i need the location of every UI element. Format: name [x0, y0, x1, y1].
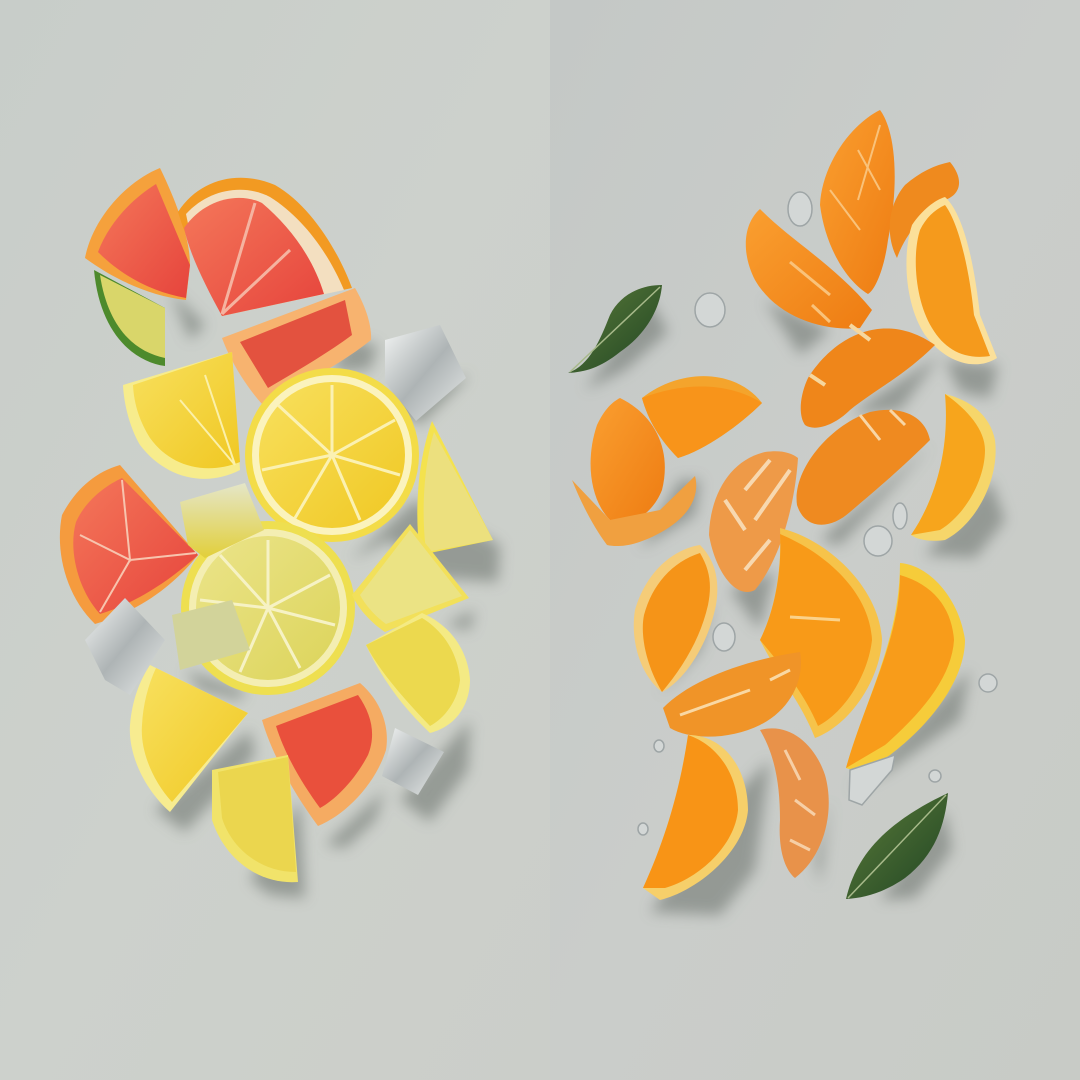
peel strip — [572, 476, 696, 546]
grapefruit slice — [222, 288, 371, 404]
lime round slice — [181, 521, 355, 695]
left fruit shadows — [155, 290, 500, 898]
segment top — [820, 110, 895, 294]
leaf top — [568, 285, 662, 373]
wedge bottom — [643, 735, 748, 900]
leaf bottom — [846, 793, 948, 899]
wedge centre left — [642, 376, 762, 458]
lemon wedge right — [417, 421, 493, 555]
right cluster: mandarin segments, leaves and water drops — [568, 110, 997, 900]
background: left panel — [0, 0, 550, 1080]
water drops — [638, 192, 997, 835]
lemon wedge centre — [352, 524, 469, 632]
segment right with pith — [906, 197, 997, 364]
left cluster: grapefruit, lemon, lime and ice — [60, 168, 493, 882]
segment centre — [801, 325, 935, 428]
lime wedge — [94, 270, 165, 366]
ice cube lower — [382, 728, 444, 795]
segment upper left — [746, 209, 872, 329]
segment lower flat — [663, 652, 801, 737]
segment left — [591, 398, 665, 522]
right fruit shadows — [585, 300, 1005, 915]
grapefruit wedge lower — [262, 683, 387, 826]
segment middle pithy — [709, 451, 798, 592]
wedge large middle — [760, 528, 882, 738]
wedge right — [911, 394, 996, 541]
lemon wedge bottom — [212, 755, 298, 882]
background: right panel — [550, 0, 1080, 1080]
segment pithy bottom — [760, 728, 829, 878]
segment top right small — [890, 162, 959, 258]
ice cube left — [85, 598, 165, 695]
lemon round slice — [245, 368, 419, 542]
lemon chunk — [366, 613, 470, 733]
grapefruit wedge top centre — [178, 178, 352, 316]
lemon wedge lower left — [130, 665, 248, 812]
segment left lower — [634, 545, 717, 692]
lemon wedge upper — [123, 352, 240, 479]
wedge right lower — [846, 563, 965, 769]
grapefruit wedge left — [60, 465, 198, 624]
grapefruit wedge top left — [85, 168, 190, 300]
ice cube on lime — [172, 600, 250, 670]
ice cube upper — [385, 325, 466, 421]
ice cube yellow — [180, 483, 264, 558]
segment mid right — [797, 410, 930, 525]
